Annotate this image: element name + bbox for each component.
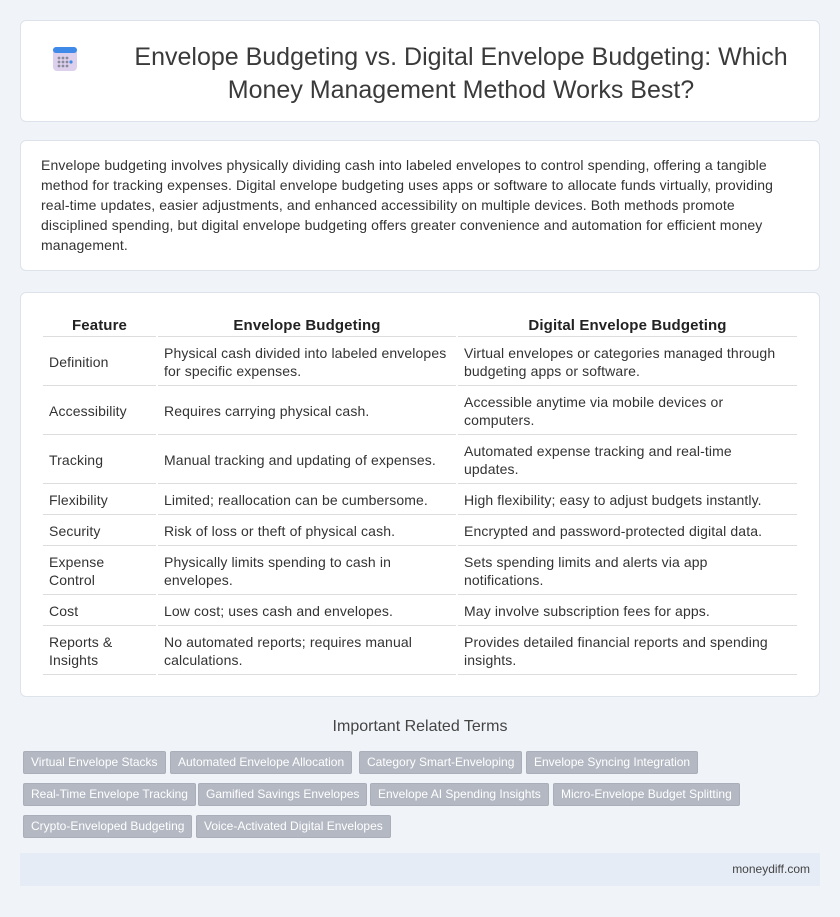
related terms tags: Crypto-Enveloped Budgeting bbox=[31, 819, 184, 833]
comparison table card bbox=[20, 292, 820, 697]
comparison table: Automated expense tracking and real-time bbox=[464, 443, 732, 459]
comparison table: Expense Control bbox=[49, 554, 104, 588]
comparison table bbox=[43, 317, 797, 675]
comparison table: Risk of loss or theft of physical cash. bbox=[164, 523, 395, 539]
comparison table: Tracking bbox=[49, 452, 103, 468]
intro text card bbox=[20, 140, 820, 271]
related terms tags: Gamified Savings Envelopes bbox=[206, 787, 359, 801]
comparison table: Reports & Insights bbox=[49, 634, 112, 668]
comparison table: Accessibility bbox=[49, 403, 127, 419]
related terms tags: Real-Time Envelope Tracking bbox=[31, 787, 188, 801]
comparison table: Requires carrying physical cash. bbox=[164, 403, 369, 419]
header card bbox=[20, 20, 820, 122]
related terms tags: Envelope Syncing Integration bbox=[534, 755, 690, 769]
comparison table: No automated reports; requires manual calculations. bbox=[164, 634, 412, 668]
comparison table: Security bbox=[49, 523, 101, 539]
comparison table: Envelope Budgeting bbox=[233, 317, 381, 334]
related terms tags: Micro-Envelope Budget Splitting bbox=[561, 787, 732, 801]
comparison table: Low cost; uses cash and envelopes. bbox=[164, 603, 393, 619]
comparison table: Cost bbox=[49, 603, 78, 619]
footer: moneydiff.com bbox=[732, 862, 810, 876]
comparison table: Flexibility bbox=[49, 492, 108, 508]
comparison table: Virtual envelopes or categories managed through budgeting apps or software. bbox=[464, 345, 775, 379]
related terms heading: Important Related Terms bbox=[333, 718, 507, 735]
comparison table: Definition bbox=[49, 354, 109, 370]
comparison table: Physically limits spending to cash in envelopes. bbox=[164, 554, 391, 588]
comparison table: Feature bbox=[72, 317, 127, 334]
comparison table: Manual tracking and updating of expenses. bbox=[164, 452, 436, 468]
comparison table: Accessible anytime via mobile devices or computers. bbox=[464, 394, 723, 428]
comparison table: Digital Envelope Budgeting bbox=[528, 317, 727, 334]
comparison table: May involve subscription fees for apps. bbox=[464, 603, 710, 619]
related terms tags: Voice-Activated Digital Envelopes bbox=[204, 819, 383, 833]
comparison table: Encrypted and password-protected digital data. bbox=[464, 523, 762, 539]
comparison table: Physical cash divided into labeled envelopes for specific expenses. bbox=[164, 345, 446, 379]
comparison table: Limited; reallocation can be cumbersome. bbox=[164, 492, 428, 508]
intro text card: Envelope budgeting involves physically dividing cash into labeled envelopes to control spending, offering a tangible method for tracking expenses. Digital envelope budgeting uses apps or software to allocate funds virtually, providing real-time updates, easier adjustments, and enhanced accessibility on multiple devices. Both methods promote disciplined spending, but digital envelope budgeting offers greater convenience and automation for efficient money management. bbox=[41, 157, 773, 253]
comparison table: Sets spending limits and alerts via app notifications. bbox=[464, 554, 708, 588]
comparison table: Provides detailed financial reports and spending insights. bbox=[464, 634, 768, 668]
title: Envelope Budgeting vs. Digital Envelope Budgeting: Which Money Management Method Works Best? bbox=[134, 43, 788, 104]
footer bbox=[20, 853, 820, 886]
related terms tags: Virtual Envelope Stacks bbox=[31, 755, 158, 769]
related terms tags: Automated Envelope Allocation bbox=[178, 755, 344, 769]
icon: calendar bbox=[53, 47, 77, 71]
related terms tags: Envelope AI Spending Insights bbox=[378, 787, 541, 801]
comparison table: updates. bbox=[464, 461, 519, 477]
related terms tags: Category Smart-Enveloping bbox=[367, 755, 514, 769]
comparison table: High flexibility; easy to adjust budgets instantly. bbox=[464, 492, 762, 508]
